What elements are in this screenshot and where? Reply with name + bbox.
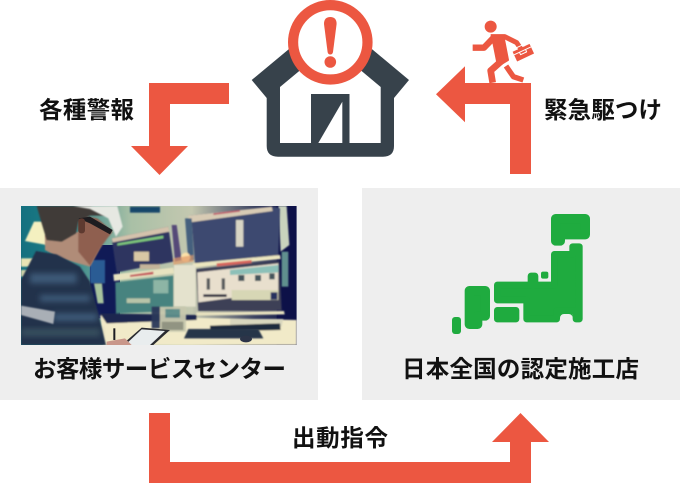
tablet	[127, 328, 170, 345]
map of Japan	[452, 219, 585, 334]
icon: house with alert	[252, 5, 409, 157]
arrow: emergency dispatch	[436, 66, 531, 174]
panel: customer service center	[0, 188, 318, 400]
alert badge	[293, 5, 367, 80]
arrow: dispatch order	[149, 413, 549, 483]
icon: running worker	[473, 21, 534, 83]
label: emergency dispatch: 緊急駆つけ	[544, 97, 662, 123]
label: certified contractors: 日本全国の認定施工店	[402, 356, 639, 382]
person	[21, 206, 132, 345]
label: dispatch order: 出動指令	[292, 425, 388, 451]
keyboard	[184, 329, 263, 338]
photo: operator at monitors	[21, 206, 297, 345]
monitors	[100, 207, 297, 345]
label: alerts: 各種警報	[39, 97, 134, 123]
phone	[152, 307, 186, 332]
panel: certified contractors	[362, 188, 680, 400]
label: customer service center: お客様サービスセンター	[33, 356, 286, 382]
arrow: alerts	[131, 83, 229, 175]
